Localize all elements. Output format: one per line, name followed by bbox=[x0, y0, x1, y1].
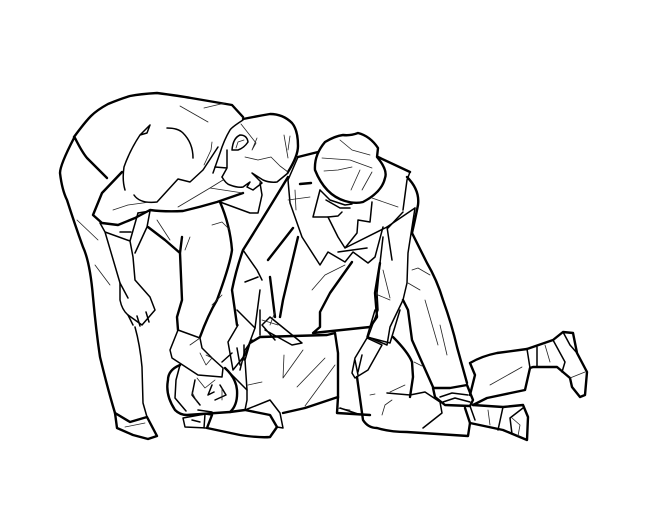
figure: standing man on the left bbox=[60, 93, 298, 439]
figure: man lying on the ground bbox=[167, 310, 470, 437]
figure: kneeling man in turban bbox=[228, 133, 587, 440]
